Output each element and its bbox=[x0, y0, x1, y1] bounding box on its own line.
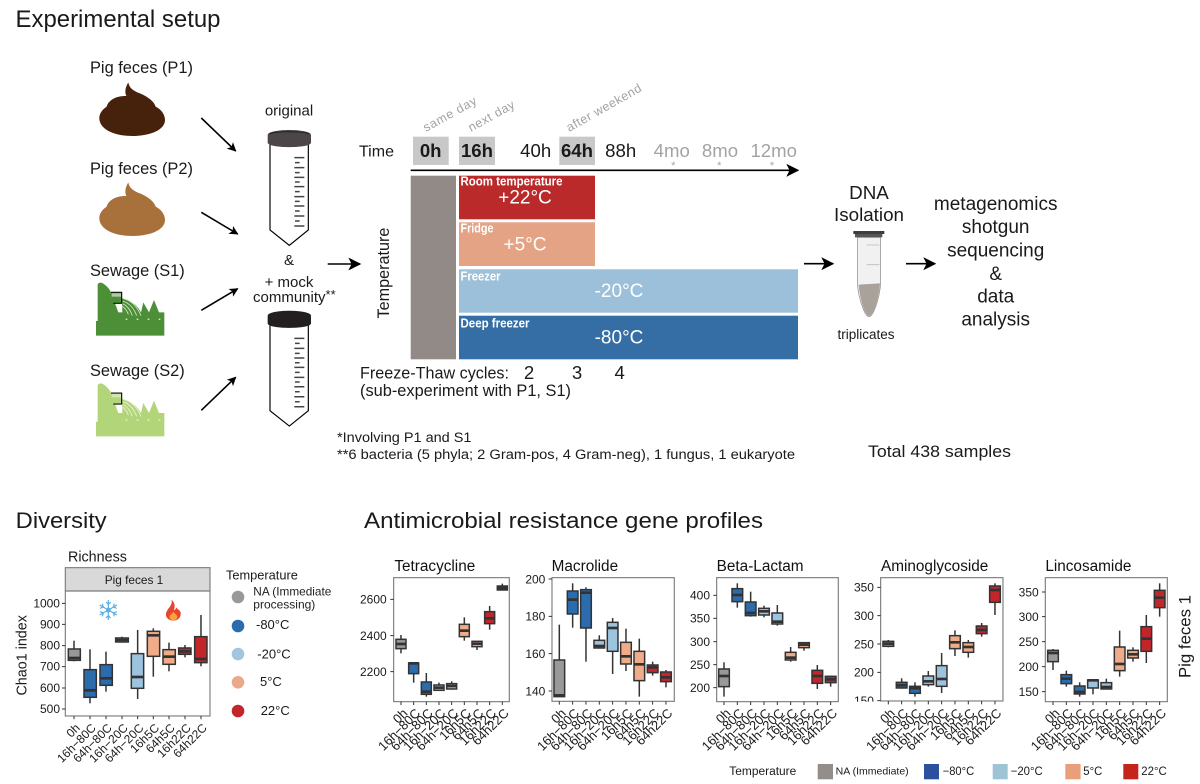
icon: light green sewage outflow bbox=[96, 383, 164, 436]
x tick labels: 0h bbox=[1042, 705, 1062, 726]
arrow: P2 to tubes bbox=[201, 212, 238, 234]
sequencing text: shotgun bbox=[962, 217, 1030, 238]
chart: tetracycline bbox=[360, 558, 512, 754]
plot frame bbox=[65, 591, 210, 716]
y axis title: Chao1 index bbox=[15, 614, 31, 696]
arrow: timeline to DNA isolation bbox=[804, 263, 833, 265]
y axis: 2600 bbox=[360, 593, 387, 607]
x ticks bbox=[559, 701, 666, 705]
x tick labels: 64h22C bbox=[633, 705, 675, 748]
time: 12mo: 12mo bbox=[750, 140, 797, 161]
icon: dark brown feces bbox=[99, 82, 165, 136]
y axis: 200 bbox=[1019, 660, 1039, 674]
bar: room temperature: +22°C bbox=[498, 188, 552, 208]
legend item: 22: 22°C bbox=[1141, 766, 1167, 778]
sequencing text: sequencing bbox=[947, 241, 1044, 262]
bar: deep freezer bbox=[459, 316, 798, 359]
footnote: mock community composition: **6 bacteria (5 phyla; 2 Gram-pos, 4 Gram-neg), 1 fungus, 1 eukaryote bbox=[337, 447, 795, 463]
legend item: -80 bbox=[232, 617, 289, 632]
label: mock community: + mock bbox=[265, 274, 314, 291]
x tick labels: 64h5C bbox=[449, 705, 486, 743]
x tick labels: 64h5C bbox=[611, 705, 649, 743]
boxes bbox=[396, 584, 507, 697]
x tick labels: 64h−80C bbox=[388, 705, 436, 754]
x tick labels: 64h−80C bbox=[70, 721, 115, 765]
x tick labels: 64h−20C bbox=[1068, 705, 1116, 754]
cycle: 3: 3 bbox=[572, 362, 582, 383]
x tick labels: 16h−20C bbox=[725, 705, 773, 754]
legend item: 22 bbox=[232, 703, 290, 718]
x tick labels: 16h5C bbox=[127, 721, 162, 756]
cycle: 2: 2 bbox=[524, 362, 534, 383]
bar: freezer: Freezer bbox=[460, 270, 501, 284]
bar: room temperature bbox=[459, 174, 595, 219]
label: pig feces P1: Pig feces (P1) bbox=[90, 59, 193, 77]
x ticks bbox=[74, 716, 201, 719]
time: 40h: 40h bbox=[520, 140, 551, 161]
label: sewage S1: Sewage (S1) bbox=[90, 262, 185, 280]
legend: AMR temperature bbox=[729, 764, 1167, 779]
icon: lower tube bbox=[268, 311, 311, 426]
x tick labels: 16h−20C bbox=[890, 705, 938, 754]
label: community: community bbox=[253, 289, 326, 306]
heading: antimicrobial resistance gene profiles: Antimicrobial resistance gene profiles bbox=[364, 508, 763, 533]
x tick labels bbox=[1028, 705, 1169, 754]
x tick labels: 64h22C bbox=[170, 721, 210, 760]
boxes bbox=[554, 583, 671, 697]
x tick labels: 64h−80C bbox=[876, 705, 924, 754]
x tick labels: 16h−80C bbox=[699, 705, 747, 754]
y axis bbox=[850, 581, 881, 708]
label: sewage S2: Sewage (S2) bbox=[90, 362, 185, 380]
x tick labels: 0h bbox=[548, 705, 569, 726]
x tick labels: 64h22C bbox=[469, 705, 512, 748]
time: 16h: 16h bbox=[461, 140, 493, 161]
x ticks bbox=[401, 702, 502, 705]
chart: aminoglycoside bbox=[850, 558, 1004, 754]
label: pig feces P2: Pig feces (P2) bbox=[90, 160, 193, 178]
legend item: -20: −20°C bbox=[1011, 766, 1043, 778]
legend title: Temperature bbox=[226, 567, 298, 582]
x tick labels: 0h bbox=[713, 705, 733, 726]
y axis: 350 bbox=[854, 581, 874, 595]
label: freeze-thaw cycles: Freeze-Thaw cycles: bbox=[360, 364, 509, 382]
x tick labels bbox=[54, 721, 210, 765]
sample sources panel bbox=[90, 59, 193, 436]
y axis: 2400 bbox=[360, 629, 387, 643]
x tick labels: 64h−20C bbox=[102, 721, 147, 765]
legend item: -20 bbox=[232, 647, 291, 662]
title: experimental setup: Experimental setup bbox=[16, 6, 220, 33]
x tick labels: 64h−80C bbox=[712, 705, 760, 754]
x tick labels bbox=[534, 705, 675, 754]
plot frame bbox=[717, 578, 838, 702]
chart: beta-lactam bbox=[690, 558, 840, 754]
x tick labels: 64h−20C bbox=[413, 705, 461, 754]
facet strip: Pig feces 1 bbox=[105, 573, 163, 587]
rotated note: after weekend: after weekend bbox=[564, 81, 644, 135]
time: 0h: 0h bbox=[420, 140, 442, 161]
boxes bbox=[1048, 583, 1165, 697]
stars: * bbox=[717, 160, 722, 172]
bar: deep freezer: Deep freezer bbox=[460, 316, 530, 330]
x tick labels: 64h22C bbox=[1126, 705, 1169, 748]
arrow: S1 to tubes bbox=[201, 289, 238, 310]
x tick labels: 16h5C bbox=[927, 705, 964, 743]
bar: fridge: Fridge bbox=[460, 222, 494, 236]
icon: light brown feces bbox=[99, 182, 165, 236]
bar: immediate processing bbox=[411, 176, 456, 359]
facet strip bbox=[65, 568, 210, 591]
y axis bbox=[690, 589, 717, 695]
chart title: Lincosamide bbox=[1045, 558, 1131, 575]
stars: * bbox=[671, 160, 676, 172]
label: original: original bbox=[265, 103, 313, 120]
y axis: 180 bbox=[525, 610, 546, 624]
y axis: 150 bbox=[1019, 685, 1039, 699]
sequencing text: analysis bbox=[961, 310, 1030, 331]
y axis: 250 bbox=[854, 637, 874, 651]
boxes bbox=[719, 583, 836, 697]
chart: macrolide bbox=[525, 558, 675, 754]
stars: * bbox=[770, 160, 775, 172]
legend item: -80 bbox=[924, 764, 974, 779]
legend item: NA bbox=[232, 584, 332, 611]
x tick labels: 64h−20C bbox=[903, 705, 951, 754]
y tick labels: 700 bbox=[40, 660, 60, 674]
label: isolation: Isolation bbox=[834, 204, 904, 225]
total samples: Total 438 samples bbox=[868, 442, 1011, 461]
x tick labels: 16h22C bbox=[948, 705, 991, 748]
x tick labels bbox=[699, 705, 840, 754]
plot frame bbox=[1045, 578, 1167, 702]
heading: diversity: Diversity bbox=[16, 508, 107, 533]
y axis: 140 bbox=[525, 684, 546, 698]
y axis bbox=[525, 572, 552, 698]
legend item: -80: −80°C bbox=[943, 766, 974, 778]
x ticks bbox=[888, 701, 995, 704]
plot frame bbox=[394, 578, 509, 702]
y axis: 200 bbox=[690, 681, 710, 695]
y tick labels bbox=[33, 596, 60, 716]
boxes bbox=[883, 583, 1000, 697]
legend item: 22 bbox=[1123, 764, 1167, 779]
label: DNA: DNA bbox=[849, 182, 889, 203]
arrow: time axis bbox=[411, 169, 798, 171]
y axis: 350 bbox=[1019, 585, 1039, 599]
x tick labels: 16h−20C bbox=[400, 705, 448, 754]
legend item: -80: -80°C bbox=[256, 617, 289, 632]
x ticks bbox=[1053, 702, 1160, 705]
x tick labels: 16h5C bbox=[598, 705, 635, 743]
tubes panel bbox=[253, 103, 336, 426]
footnote: involving: *Involving P1 and S1 bbox=[337, 430, 472, 446]
chart title: Richness bbox=[68, 549, 127, 565]
plot frame bbox=[881, 578, 1003, 701]
legend item: NA: NA (Immediate bbox=[253, 584, 332, 598]
x tick labels: 0h bbox=[63, 721, 83, 740]
y axis: 400 bbox=[690, 589, 710, 603]
y axis: 2200 bbox=[360, 665, 387, 679]
x tick labels: 16h22C bbox=[619, 705, 662, 748]
legend item: 22: 22°C bbox=[261, 703, 290, 718]
arrow: isolation to sequencing bbox=[906, 263, 935, 265]
label: sub-experiment: (sub-experiment with P1, S1) bbox=[360, 381, 571, 400]
label: ampersand: & bbox=[284, 252, 294, 269]
x tick labels: 16h5C bbox=[762, 705, 800, 743]
y axis: 350 bbox=[690, 612, 710, 626]
x tick labels: 16h−80C bbox=[534, 705, 582, 754]
x tick labels: 16h−80C bbox=[1028, 705, 1076, 754]
x tick labels: 16h−20C bbox=[86, 721, 131, 765]
bar: fridge: +5°C bbox=[504, 235, 546, 256]
highlight: 64h bbox=[559, 137, 595, 165]
bar: fridge bbox=[459, 222, 595, 266]
x tick labels: 16h5C bbox=[1091, 705, 1129, 743]
chart: lincosamide bbox=[1019, 558, 1169, 754]
x tick labels: 64h5C bbox=[940, 705, 978, 743]
x ticks bbox=[724, 702, 831, 705]
y axis: 300 bbox=[1019, 610, 1039, 624]
sequencing text: & bbox=[989, 264, 1002, 285]
label: community: ** bbox=[326, 287, 336, 302]
x tick labels: 16h22C bbox=[456, 705, 499, 748]
x tick labels: 64h22C bbox=[797, 705, 840, 748]
legend item: NA: processing) bbox=[253, 597, 315, 611]
chart title: Macrolide bbox=[552, 558, 618, 575]
x tick labels: 64h5C bbox=[143, 721, 178, 756]
highlight: 0h bbox=[413, 137, 449, 165]
y tick labels: 500 bbox=[40, 702, 60, 716]
legend item: 5: 5°C bbox=[1083, 766, 1102, 778]
chart title: Aminoglycoside bbox=[881, 558, 988, 575]
y axis bbox=[1019, 585, 1045, 699]
label: triplicates: triplicates bbox=[837, 327, 895, 342]
legend title: Temperature bbox=[729, 766, 796, 778]
chart title: Beta-Lactam bbox=[717, 558, 804, 575]
icon: microtube bbox=[853, 231, 884, 317]
stars bbox=[671, 160, 775, 172]
x tick labels: 16h22C bbox=[154, 721, 194, 760]
label: time: Time bbox=[359, 144, 394, 160]
sequencing text bbox=[934, 194, 1057, 331]
legend item: NA bbox=[818, 764, 909, 779]
x tick labels: 16h5C bbox=[436, 705, 474, 743]
bar: deep freezer: -80°C bbox=[595, 328, 643, 348]
cycle: 4: 4 bbox=[615, 362, 625, 383]
timeline panel bbox=[359, 81, 798, 400]
y axis: 160 bbox=[525, 647, 546, 661]
arrow: S2 to tubes bbox=[201, 377, 236, 410]
legend item: -20 bbox=[993, 764, 1043, 779]
x tick labels bbox=[863, 705, 1004, 754]
rotated note: next day: next day bbox=[466, 97, 518, 135]
y tick labels: 1000 bbox=[33, 596, 60, 610]
time: 8mo: 8mo bbox=[702, 140, 738, 161]
x tick labels: 0h bbox=[877, 705, 898, 726]
time: 88h: 88h bbox=[605, 140, 636, 161]
y axis bbox=[62, 603, 65, 709]
bar: freezer: -20°C bbox=[595, 281, 643, 302]
highlight: 16h bbox=[459, 137, 495, 165]
x tick labels: 0h bbox=[390, 705, 410, 726]
x tick labels: 64h−80C bbox=[547, 705, 595, 754]
icon: snowflake bbox=[100, 600, 117, 620]
sequencing text: metagenomics bbox=[934, 194, 1057, 215]
x tick labels: 16h−80C bbox=[863, 705, 911, 754]
x tick labels bbox=[375, 705, 512, 754]
x tick labels: 64h−20C bbox=[739, 705, 787, 754]
y tick labels: 800 bbox=[40, 639, 60, 653]
DNA isolation panel bbox=[834, 182, 904, 342]
x tick labels: 16h22C bbox=[1113, 705, 1156, 748]
y axis: 200 bbox=[525, 572, 546, 586]
x tick labels: 64h22C bbox=[962, 705, 1004, 748]
legend item: 5: 5°C bbox=[260, 674, 282, 689]
x tick labels: 16h−20C bbox=[1054, 705, 1102, 754]
boxes bbox=[68, 615, 207, 703]
legend item: -20: -20°C bbox=[257, 647, 291, 662]
legend item: 5 bbox=[1065, 764, 1102, 779]
y axis: 150 bbox=[854, 694, 874, 708]
y tick labels: 900 bbox=[40, 617, 60, 631]
x tick labels: 16h−80C bbox=[375, 705, 423, 754]
x tick labels: 16h22C bbox=[784, 705, 827, 748]
legend item: 5 bbox=[232, 674, 282, 689]
sequencing text: data bbox=[977, 287, 1015, 308]
legend: richness temperature bbox=[226, 567, 332, 718]
legend item: NA: NA (Immediate) bbox=[836, 766, 909, 778]
y axis: 300 bbox=[854, 609, 874, 623]
row label: pig feces 1: Pig feces 1 bbox=[1176, 595, 1195, 678]
bar: freezer bbox=[459, 269, 798, 313]
time: 4mo: 4mo bbox=[654, 140, 690, 161]
y axis: 300 bbox=[690, 635, 710, 649]
x tick labels: 64h5C bbox=[1105, 705, 1142, 743]
x tick labels: 64h5C bbox=[776, 705, 813, 743]
x tick labels: 16h−20C bbox=[561, 705, 609, 754]
x tick labels: 16h−80C bbox=[54, 721, 99, 765]
chart title: Tetracycline bbox=[394, 558, 475, 575]
x tick labels: 64h−20C bbox=[574, 705, 622, 754]
y tick labels: 600 bbox=[40, 681, 60, 695]
icon: flame bbox=[166, 600, 181, 621]
chart: richness boxplot bbox=[15, 549, 210, 765]
y axis bbox=[360, 593, 394, 679]
y axis: 200 bbox=[854, 666, 874, 680]
bar: room temperature: Room temperature bbox=[460, 174, 563, 188]
time: 64h: 64h bbox=[561, 140, 593, 161]
icon: upper tube bbox=[268, 130, 311, 245]
y axis: 250 bbox=[690, 658, 710, 672]
arrow: P1 to tubes bbox=[201, 118, 236, 151]
arrow: tubes to timeline bbox=[328, 263, 360, 265]
label: temperature axis: Temperature bbox=[375, 228, 393, 318]
plot frame bbox=[552, 578, 674, 701]
y axis: 250 bbox=[1019, 635, 1039, 649]
rotated note: same day: same day bbox=[421, 93, 480, 135]
icon: dark green sewage outflow bbox=[96, 283, 164, 336]
x tick labels: 64h−80C bbox=[1041, 705, 1089, 754]
